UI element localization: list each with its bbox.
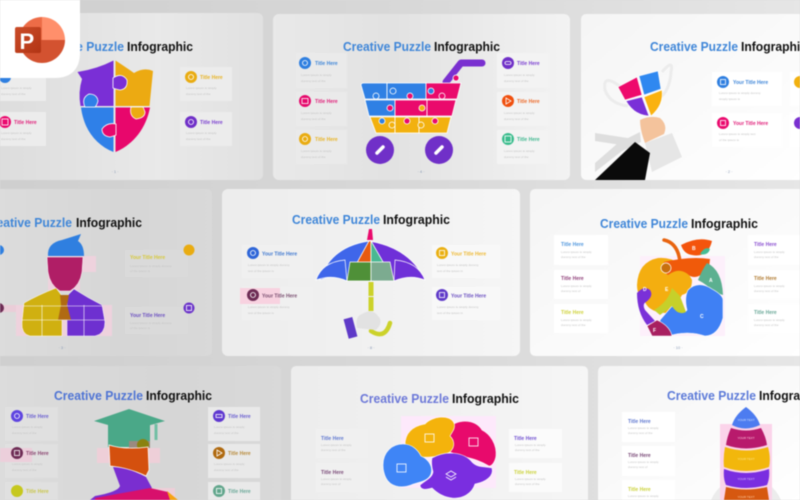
- piece green inner: [654, 288, 686, 315]
- panel: cloud puzzle slide: [291, 366, 588, 500]
- stem: [664, 240, 680, 262]
- panel: umbrella slide: [222, 189, 520, 356]
- card: purple right: dummy text of the: [186, 137, 211, 141]
- card: green: dummy text of the: [504, 155, 529, 159]
- card: maroon: Lorem ipsum is simply: [12, 462, 43, 466]
- card: pink left: dummy text of the: [1, 137, 26, 141]
- heading: apple slide: Infographic: [691, 217, 758, 231]
- cart wheel right: [425, 136, 453, 164]
- neck and chest: [90, 467, 152, 500]
- heading: umbrella slide: Creative Puzzle: [292, 213, 380, 227]
- shirt cuff: [645, 133, 682, 172]
- card: maroon: dummy text of: [321, 482, 341, 486]
- card: maroon: Lorem ipsum is simply: [561, 284, 592, 288]
- card: maroon: Lorem ipsum is simply: [321, 477, 352, 481]
- piece D purple: D: [643, 287, 647, 293]
- card: maroon: Title Here: [561, 276, 584, 282]
- puzzle businessman: [16, 234, 112, 336]
- card: pink: [712, 113, 782, 147]
- card: maroon: [316, 463, 368, 492]
- card: green right: [208, 482, 260, 500]
- card: purple right: Lorem ipsum is simply: [186, 131, 217, 135]
- icon: PowerPoint logo: P: [20, 29, 34, 54]
- card: purple: Lorem ipsum is simply dummy: [437, 305, 479, 309]
- card: orange: Title Here: [517, 99, 540, 105]
- card: pink: Your Title Here: [733, 121, 768, 127]
- card: pink: of the ipsum is: [719, 138, 739, 142]
- handle sleeve: [344, 317, 357, 339]
- card: maroon: Title Here: [321, 470, 344, 476]
- card: pink: [296, 92, 347, 126]
- card: purple: [748, 235, 800, 265]
- card: yellow right: Lorem ipsum is simply: [186, 86, 217, 90]
- hair: [48, 234, 84, 256]
- card: blue: [622, 412, 675, 442]
- trophy with hand: [595, 65, 682, 180]
- card: teal: [748, 304, 800, 333]
- panel: trophy slide: [581, 14, 800, 180]
- card: teal: Title Here: [754, 310, 777, 316]
- card: purple: Your Title Here: [130, 313, 165, 319]
- card: blue: Lorem ipsum is simply dummy: [248, 263, 290, 267]
- piece C blue: C: [700, 314, 704, 320]
- tassel: [154, 424, 158, 440]
- puzzle apple: [637, 239, 725, 336]
- card: purple: [125, 302, 194, 334]
- piece yellow: [405, 417, 455, 457]
- card: blue left: Lorem ipsum is simply: [1, 86, 32, 90]
- card: blue: [296, 53, 347, 88]
- piece A teal: A: [709, 278, 713, 284]
- card: purple: dummy text of the: [515, 448, 540, 452]
- card: orange: dummy text of the: [754, 289, 779, 293]
- card: lime: Title Here: [26, 489, 49, 495]
- card: maroon: [0, 444, 58, 478]
- card: indigo: [5, 407, 58, 441]
- card: blue: dummy text of the: [321, 448, 346, 452]
- card: indigo right: dummy text of the: [214, 431, 239, 435]
- puzzle rocket: [711, 407, 781, 500]
- pink artefact block: [720, 424, 772, 500]
- heading: apple slide: [600, 217, 758, 231]
- card: green: Title Here: [517, 137, 540, 143]
- card: yellow: of the ipsum is: [130, 269, 150, 273]
- card: yellow, cropped: [790, 72, 800, 106]
- segment yellow: YOUR TEXT: [737, 457, 755, 461]
- piece E yellow: E: [665, 287, 669, 293]
- segment purple: YOUR TEXT: [737, 477, 755, 481]
- canopy segments: [316, 241, 425, 281]
- grey base circle: [711, 477, 781, 500]
- card: purple: of the ipsum is: [130, 326, 150, 330]
- card: maroon: Lorem ipsum is simply dummy: [248, 305, 290, 309]
- pagination: · 10 ·: [673, 345, 683, 350]
- card: blue left: dummy text of the: [1, 92, 26, 96]
- panel: apple slide: [530, 189, 800, 356]
- puzzle cloud: [383, 416, 496, 498]
- pagination: · 2 ·: [725, 169, 733, 174]
- heading: trophy slide: Creative Puzzle: [650, 40, 738, 54]
- card: pink left: Lorem ipsum is simply: [1, 131, 32, 135]
- card: purple: Title Here: [517, 61, 540, 67]
- icon: layers: [446, 471, 456, 480]
- card: yellow: [125, 244, 194, 277]
- card: purple right: [180, 112, 232, 146]
- card: blue: text of the ipsum is: [248, 269, 274, 273]
- card: green: Lorem ipsum is simply: [504, 149, 535, 153]
- card: purple: dummy text of the: [754, 255, 779, 259]
- card: maroon: Lorem ipsum is simply: [628, 460, 659, 464]
- black sleeve: [595, 142, 650, 180]
- card: yellow: Lorem ipsum is simply: [301, 149, 332, 153]
- cart puzzle pieces: [361, 75, 461, 133]
- heading: shield slide: Infographic: [127, 40, 193, 54]
- heading: apple slide: Creative Puzzle: [600, 217, 688, 231]
- piece top orange: [661, 258, 710, 277]
- card: orange: [748, 270, 800, 299]
- card: indigo: dummy text of the: [12, 431, 37, 435]
- card: purple: [509, 429, 562, 458]
- pagination: · 4 ·: [417, 169, 425, 174]
- heading: trophy slide: [650, 40, 800, 54]
- face: [109, 445, 149, 476]
- icon: blue cropped: [0, 245, 4, 255]
- card: indigo right: Lorem ipsum is simply: [214, 425, 245, 429]
- puzzle umbrella: [316, 229, 425, 339]
- card: blue: [712, 72, 782, 106]
- card: lime: Title Here: [514, 470, 537, 476]
- card: indigo: Title Here: [26, 414, 49, 420]
- card: orange: Title Here: [754, 276, 777, 282]
- card: blue: Lorem ipsum is simply dummy: [719, 91, 761, 95]
- pagination: · 3 ·: [58, 345, 66, 350]
- card: pink: Title Here: [315, 99, 338, 105]
- card: pink: Lorem ipsum is simply text: [719, 132, 756, 136]
- heading: shield slide: [35, 40, 193, 54]
- card: lime: Title Here: [561, 310, 584, 316]
- card: yellow: Lorem ipsum is simply dummy: [130, 264, 172, 268]
- card: yellow: [296, 130, 347, 164]
- card: blue: Title Here: [315, 61, 338, 67]
- card: maroon: dummy text of the: [12, 468, 37, 472]
- card: blue: dummy text of the: [561, 255, 586, 259]
- card: maroon: Your Title Here: [262, 294, 297, 300]
- card: pink left: Title Here: [14, 120, 37, 126]
- card: blue left: [0, 67, 46, 101]
- card: blue: [242, 245, 312, 278]
- card: lime: Lorem ipsum is simply: [515, 477, 546, 481]
- pagination: · 1 ·: [111, 169, 119, 174]
- card: pink: Lorem ipsum is simply: [301, 111, 332, 115]
- card: pink left: [0, 112, 46, 146]
- tie: [58, 295, 71, 320]
- cap board: [94, 409, 165, 431]
- card: maroon: [622, 446, 675, 476]
- pagination: · 8 ·: [367, 345, 375, 350]
- card: purple: Lorem ipsum is simply: [754, 250, 785, 254]
- heading: businessman slide: [0, 216, 142, 230]
- umbrella hook: [371, 323, 390, 334]
- card: purple: [497, 53, 549, 88]
- leaf B: B: [692, 246, 696, 252]
- card: blue: Lorem ipsum is simply: [628, 426, 659, 430]
- card: teal: dummy text of the: [754, 323, 779, 327]
- knob: [137, 439, 149, 451]
- heading: graduate slide: Infographic: [146, 389, 212, 403]
- card: blue: [316, 429, 368, 458]
- heading: umbrella slide: Infographic: [383, 213, 450, 227]
- card: orange: Lorem ipsum is simply: [504, 111, 535, 115]
- card: amber right: Title Here: [228, 451, 251, 457]
- card: maroon: [554, 270, 608, 299]
- card: yellow: Lorem ipsum is simply dummy: [437, 263, 479, 267]
- card: blue: Title Here: [321, 436, 344, 442]
- card: amber right: dummy text of the: [214, 468, 239, 472]
- shield knobs: [84, 75, 145, 137]
- heading: cart slide: Creative Puzzle: [343, 40, 431, 54]
- pink artefact blocks: [16, 256, 112, 336]
- card: maroon: text of the ipsum is: [248, 311, 274, 315]
- icon: clipboard: [425, 434, 434, 442]
- icon: window blue: [397, 464, 406, 472]
- pale artefact block: [401, 416, 496, 488]
- piece purple: [420, 453, 492, 498]
- card: yellow right: [180, 67, 232, 101]
- umbrella tip: [367, 229, 373, 240]
- jacket left: [22, 288, 62, 336]
- card: blue: Title Here: [561, 242, 584, 248]
- trophy handles: [605, 65, 672, 106]
- card: purple: text of the ipsum is: [437, 311, 463, 315]
- card: purple right: Title Here: [200, 120, 223, 126]
- umbrella handle: [368, 282, 374, 311]
- trophy puzzle cup: [618, 71, 662, 116]
- card: maroon: [240, 287, 312, 320]
- card: purple, cropped: [790, 113, 800, 147]
- card: blue: Title Here: [628, 419, 651, 425]
- card: orange: dummy text of the: [504, 117, 529, 121]
- card: purple: [432, 287, 500, 320]
- card: pink: dummy text of the: [301, 117, 326, 121]
- panel: shopping cart slide: [273, 14, 570, 180]
- card: lime: dummy text of the: [515, 482, 540, 486]
- card: maroon: dummy text of: [628, 465, 648, 469]
- card: maroon: dummy text of: [561, 289, 581, 293]
- heading: shield slide: Creative Puzzle: [35, 40, 124, 54]
- piece pink: [443, 421, 496, 466]
- face: [47, 257, 83, 291]
- heading: rocket slide: [667, 389, 800, 403]
- heading: cart slide: [343, 40, 500, 54]
- card: yellow: [432, 245, 500, 278]
- PowerPoint badge: [0, 0, 80, 78]
- card: blue: Lorem ipsum is simply: [301, 73, 332, 77]
- card: yellow right: dummy text of the: [186, 92, 211, 96]
- card: green: [497, 130, 549, 164]
- card: blue: Your Title Here: [262, 252, 297, 258]
- heading: graduate slide: Creative Puzzle: [54, 389, 143, 403]
- card: purple: Title Here: [754, 242, 777, 248]
- heading: graduate slide: [54, 389, 212, 403]
- card: yellow right: Title Here: [200, 75, 223, 81]
- pale artefact block: [640, 256, 725, 336]
- card: lime: [509, 463, 562, 492]
- card: orange: Lorem ipsum is simply: [754, 284, 785, 288]
- card: teal: Lorem ipsum is simply: [754, 318, 785, 322]
- card: orange: [497, 92, 549, 126]
- card: indigo: Lorem ipsum is simply: [12, 425, 43, 429]
- card: yellow: dummy text of the: [301, 155, 326, 159]
- card: maroon: Title Here: [26, 451, 49, 457]
- card: purple: Lorem ipsum is simply: [504, 73, 535, 77]
- puzzle graduate: [90, 409, 178, 500]
- shoulder orange: [167, 491, 178, 500]
- card: lime: Lorem ipsum is simply: [628, 494, 659, 498]
- heading: umbrella slide: [292, 213, 450, 227]
- card: blue: Lorem ipsum is simply: [321, 443, 352, 447]
- heading: cart slide: Infographic: [434, 40, 500, 54]
- cart handle: [446, 63, 482, 82]
- segment pink: YOUR TEXT: [737, 436, 755, 440]
- card: purple: dummy text of the: [504, 79, 529, 83]
- card: blue: Your Title Here: [733, 80, 768, 86]
- card: green right: Title Here: [228, 489, 251, 495]
- jacket right: [67, 289, 105, 336]
- heading: cloud slide: [360, 392, 519, 406]
- segment blue: YOUR TEXT: [737, 418, 755, 422]
- band: [129, 441, 150, 448]
- piece lines: [22, 305, 105, 336]
- icon: maroon cropped: [0, 303, 22, 313]
- card: yellow: Your Title Here: [130, 255, 165, 261]
- card: lime: Title Here: [628, 487, 651, 493]
- card: amber right: Lorem ipsum is simply: [214, 462, 245, 466]
- grey ribbons: [595, 132, 641, 172]
- cap base: [108, 425, 150, 447]
- segment orange: YOUR TEXT: [737, 495, 755, 499]
- card: purple: Lorem ipsum is simply: [515, 443, 546, 447]
- panel: graduate slide: [0, 366, 281, 500]
- card: lime: dummy text of the: [561, 323, 586, 327]
- pink artefact blocks: [97, 448, 175, 500]
- hand: [640, 117, 665, 143]
- card: purple: Lorem ipsum is simply dummy: [130, 321, 172, 325]
- grey cloud: [357, 311, 381, 330]
- card: purple: Title Here: [514, 436, 537, 442]
- card: lime: [554, 304, 608, 333]
- card: blue: dummy text of the: [628, 431, 653, 435]
- piece F maroon: F: [653, 328, 656, 334]
- puzzle shield: [78, 60, 153, 152]
- panel: businessman slide: [0, 189, 212, 356]
- card: lime: Lorem ipsum is simply: [561, 318, 592, 322]
- card: indigo right: Title Here: [228, 414, 251, 420]
- card: yellow: Your Title Here: [451, 252, 486, 258]
- panel: shield slide: [0, 13, 263, 180]
- shoulder pink: [95, 488, 172, 500]
- card: blue: simply ipsum is: [719, 97, 740, 101]
- card: amber right: [208, 444, 260, 478]
- card: purple: Your Title Here: [451, 294, 486, 300]
- card: yellow: Title Here: [315, 137, 338, 143]
- card: blue: Lorem ipsum is simply: [561, 250, 592, 254]
- card: blue: [554, 235, 608, 265]
- heading: rocket slide: Creative Puzzle: [667, 389, 756, 403]
- card: lime: [5, 482, 58, 500]
- icon: window pink: [469, 438, 478, 446]
- card: maroon: Title Here: [628, 453, 651, 459]
- card: indigo right: [208, 407, 260, 441]
- heading: businessman slide: Infographic: [76, 216, 142, 230]
- card: yellow: text of the ipsum is: [437, 269, 463, 273]
- heading: cloud slide: Infographic: [452, 392, 519, 406]
- piece blue: [383, 444, 432, 487]
- puzzle shopping cart: [361, 63, 482, 164]
- card: blue: dummy text of the: [301, 79, 326, 83]
- card: lime: [622, 480, 675, 500]
- panel: rocket slide: [598, 366, 800, 500]
- heading: cloud slide: Creative Puzzle: [360, 392, 449, 406]
- cart wheel left: [366, 136, 394, 164]
